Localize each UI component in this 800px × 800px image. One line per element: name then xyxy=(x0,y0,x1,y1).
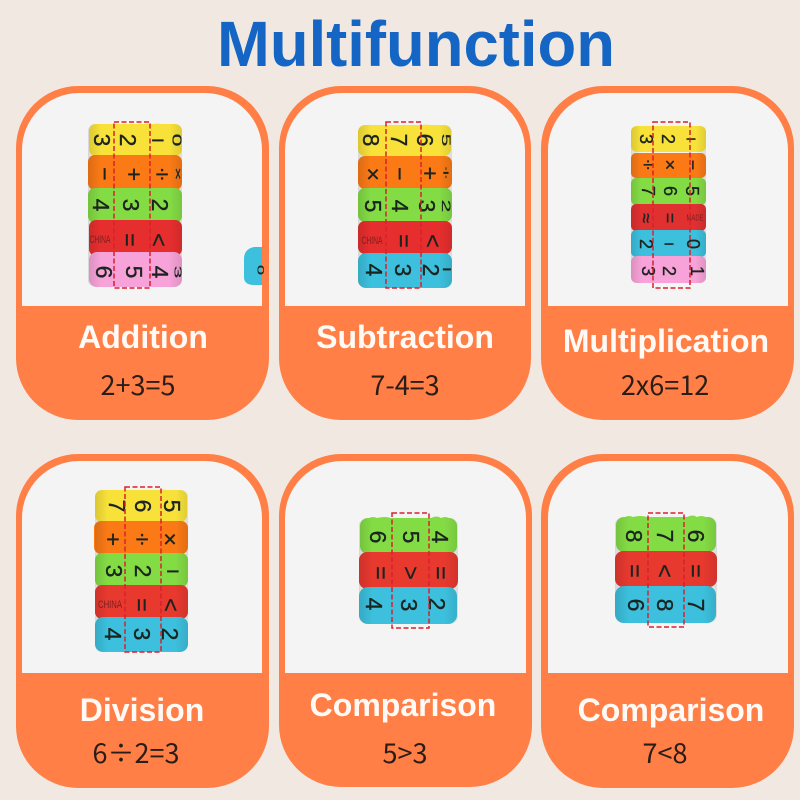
ring stack: 2+3=5: CHINA xyxy=(90,234,111,246)
ring stack: 2+3=5: 2 xyxy=(147,199,173,211)
heading: comparison: Comparison xyxy=(310,687,496,723)
ring stack: 2x6=12: 3 xyxy=(638,266,658,276)
ring stack: 7<8: = xyxy=(622,564,648,578)
loose blue ring: 0 xyxy=(255,265,265,275)
ring stack: 6÷2=3: < xyxy=(158,598,184,612)
ring stack: 7-4=3: CHINA xyxy=(362,235,383,247)
equation: 7-4=3 xyxy=(370,364,440,403)
ring stack: 7-4=3: 5 xyxy=(360,200,386,212)
ring stack: 7-4=3: = xyxy=(391,234,417,248)
ring stack: 2x6=12: = xyxy=(660,213,680,223)
ring stack: 7-4=3: 2 xyxy=(440,200,452,212)
ring stack: 2+3=5: − xyxy=(151,127,165,153)
title: Multifunction xyxy=(217,8,615,80)
panel: multiplication xyxy=(541,86,794,420)
panel: addition xyxy=(16,86,269,420)
ring stack: 2+3=5: ÷ xyxy=(156,161,168,187)
ring stack: 2+3=5: < xyxy=(146,233,172,247)
ring stack: 2+3=5: = xyxy=(117,233,143,247)
equation: 6÷2=3 xyxy=(93,732,179,771)
ring stack: 2x6=12: 2 xyxy=(658,134,678,144)
equation: 7<8 xyxy=(643,732,687,771)
ring stack: 6÷2=3 xyxy=(94,487,188,652)
ring stack: 2+3=5 xyxy=(88,122,184,288)
ring stack: 6÷2=3: 7 xyxy=(104,500,130,512)
ring stack: 7-4=3: 6 xyxy=(412,134,438,146)
ring stack: 2+3=5: 2 xyxy=(115,134,141,146)
ring stack: 7-4=3: − xyxy=(442,257,452,283)
panel: comparison greater xyxy=(279,454,532,787)
ring stack: 7<8 xyxy=(615,513,717,627)
photo area xyxy=(548,461,788,673)
heading: subtraction: Subtraction xyxy=(316,319,494,355)
ring stack: 2x6=12: − xyxy=(683,160,703,170)
ring stack: 5>3: 6 xyxy=(365,531,391,543)
photo area xyxy=(285,93,525,306)
photo area xyxy=(285,461,526,673)
ring stack: 6÷2=3: 3 xyxy=(101,565,127,577)
photo area xyxy=(22,461,262,673)
ring stack: 2+3=5: 3 xyxy=(172,266,184,278)
card background xyxy=(541,86,794,420)
ring stack: 6÷2=3: ÷ xyxy=(136,526,148,552)
ring stack: 7-4=3: ÷ xyxy=(443,160,449,186)
ring stack: 5>3: = xyxy=(368,566,394,580)
ring stack: 2x6=12: 5 xyxy=(682,186,702,196)
ring stack: 7-4=3: < xyxy=(420,234,446,248)
ring stack: 2+3=5: 5 xyxy=(121,266,147,278)
card background xyxy=(541,454,794,788)
heading: division: Division xyxy=(80,692,204,728)
ring stack: 2+3=5: 4 xyxy=(147,266,173,279)
ring stack: 2+3=5: 4 xyxy=(88,199,114,212)
ring stack: 7-4=3: 4 xyxy=(361,264,387,277)
ring stack: 5>3 xyxy=(359,513,458,628)
ring stack: 2x6=12: MADE xyxy=(686,214,704,222)
ring stack: 5>3: 3 xyxy=(396,599,422,611)
ring stack: 7-4=3: 7 xyxy=(386,134,412,146)
ring stack: 2+3=5: 3 xyxy=(118,199,144,211)
photo area xyxy=(548,93,788,306)
ring stack: 6÷2=3: × xyxy=(163,526,177,552)
card background xyxy=(279,454,532,787)
ring stack: 7<8: 8 xyxy=(652,599,678,611)
ring stack: 5>3: > xyxy=(398,566,424,580)
panel: comparison less xyxy=(541,454,794,788)
ring stack: 5>3: 4 xyxy=(361,598,387,611)
ring stack: 2x6=12: ÷ xyxy=(643,155,653,175)
card background xyxy=(16,454,269,788)
ring stack: 7<8: 7 xyxy=(683,599,709,611)
loose blue ring xyxy=(244,247,265,285)
ring stack: 2x6=12: 2 xyxy=(659,266,679,276)
ring stack: 5>3: 4 xyxy=(427,531,453,544)
heading: multiplication: Multiplication xyxy=(563,323,769,359)
panel: division xyxy=(16,454,269,788)
panel: subtraction xyxy=(279,86,531,420)
ring stack: 2x6=12: − xyxy=(686,129,696,149)
card background xyxy=(16,86,269,420)
ring stack: 6÷2=3: 5 xyxy=(159,500,185,512)
ring stack: 2+3=5: + xyxy=(127,161,141,187)
ring stack: 2x6=12: 6 xyxy=(660,186,680,196)
ring stack: 2+3=5: 6 xyxy=(91,266,117,278)
ring stack: 2x6=12: 0 xyxy=(683,239,703,249)
ring stack: 2+3=5: 3 xyxy=(89,134,115,146)
ring stack: 6÷2=3: 2 xyxy=(130,565,156,577)
ring stack: 5>3: 2 xyxy=(424,598,450,610)
ring stack: 2x6=12: 3 xyxy=(636,134,656,144)
ring stack: 6÷2=3: 2 xyxy=(157,628,183,640)
photo area xyxy=(22,93,262,306)
ring stack: 5>3: = xyxy=(428,566,454,580)
ring stack: 6÷2=3: CHINA xyxy=(98,599,122,611)
ring stack: 7<8: 8 xyxy=(621,530,647,542)
ring stack: 2+3=5: × xyxy=(175,161,181,187)
ring stack: 2x6=12: 1 xyxy=(687,266,707,276)
ring stack: 7-4=3: 3 xyxy=(414,200,440,212)
ring stack: 6÷2=3: − xyxy=(166,558,180,584)
card background xyxy=(279,86,531,420)
ring stack: 7-4=3: 5 xyxy=(440,134,452,146)
ring stack: 6÷2=3: + xyxy=(106,526,120,552)
ring stack: 5>3: 5 xyxy=(398,531,424,543)
ring stack: 7-4=3: 8 xyxy=(358,134,384,146)
ring stack: 6÷2=3: 3 xyxy=(129,628,155,640)
ring stack: 6÷2=3: 6 xyxy=(130,500,156,512)
heading: comparison: Comparison xyxy=(578,692,764,728)
ring stack: 2x6=12: × xyxy=(665,155,675,175)
ring stack: 2+3=5: 0 xyxy=(170,134,184,146)
ring stack: 7<8: 6 xyxy=(623,599,649,611)
ring stack: 6÷2=3: 4 xyxy=(100,628,126,641)
ring stack: 2x6=12: − xyxy=(664,234,674,254)
ring stack: 7-4=3: + xyxy=(423,160,437,186)
ring stack: 2x6=12: 7 xyxy=(638,186,658,196)
ring stack: 2+3=5: − xyxy=(92,167,118,181)
equation: 2x6=12 xyxy=(621,364,709,403)
ring stack: 7-4=3: 4 xyxy=(387,200,413,213)
ring stack: 7<8: 7 xyxy=(652,530,678,542)
ring stack: 6÷2=3: = xyxy=(129,598,155,612)
ring stack: 7-4=3: 3 xyxy=(390,264,416,276)
ring stack: 7<8: = xyxy=(683,564,709,578)
ring stack: 7<8: 6 xyxy=(683,530,709,542)
ring stack: 7-4=3: × xyxy=(366,161,380,187)
equation: 5>3 xyxy=(383,732,427,771)
heading: addition: Addition xyxy=(78,319,208,355)
ring stack: 2x6=12: ≈ xyxy=(636,213,656,223)
equation: 2+3=5 xyxy=(101,364,175,403)
ring stack: 7-4=3: − xyxy=(387,167,413,181)
ring stack: 7-4=3 xyxy=(358,122,452,288)
ring stack: 7<8: < xyxy=(652,564,678,578)
ring stack: 2x6=12 xyxy=(631,122,707,288)
ring stack: 2x6=12: 2 xyxy=(636,239,656,249)
ring stack: 7-4=3: 2 xyxy=(418,264,444,276)
